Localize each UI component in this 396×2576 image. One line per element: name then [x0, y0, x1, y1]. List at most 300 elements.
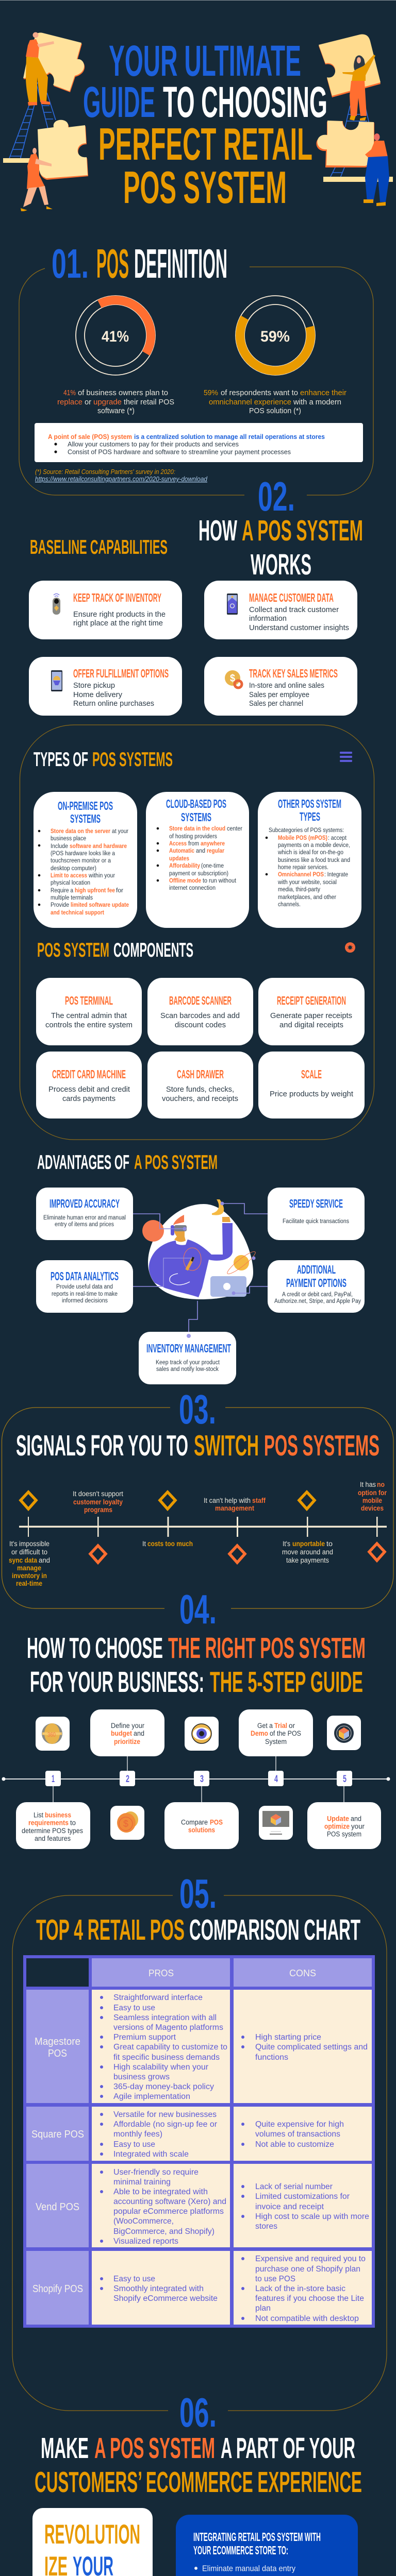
card: integrating retail POS with ecommerce	[176, 2515, 358, 2576]
table row: Magestore POS: business grows	[113, 2073, 170, 2081]
table row: Magestore POS: High scalability when your	[113, 2063, 208, 2072]
table row: Shopify POS: Shopify eCommerce website	[113, 2294, 218, 2303]
card: credit card machine: CREDIT CARD MACHINE	[52, 1067, 126, 1081]
text block: signal loyalty programs: programs	[84, 1506, 112, 1514]
card: cloud-based POS systems: Automatic	[169, 847, 194, 854]
panel: signals outline	[2, 1408, 393, 1608]
text block: signal staff management: staff	[252, 1497, 266, 1504]
heading: 02 How a POS system works	[199, 473, 363, 581]
card: inventory management: Keep track of your product	[156, 1360, 220, 1366]
card: additional payment options: A credit or debit card, PayPal,	[282, 1292, 353, 1298]
table row: Magestore POS: fit specific business demands	[113, 2053, 220, 2062]
card: POS terminal: controls the entire system	[45, 1021, 133, 1029]
card: receipt generation	[258, 978, 365, 1045]
table row: Vend POS: accounting software (Xero) and	[113, 2197, 226, 2206]
heading: 03 signals to switch: SIGNALS FOR YOU TO	[16, 1429, 188, 1462]
title: GUIDE	[83, 78, 155, 126]
card: speedy service	[268, 1188, 365, 1240]
card: other POS system types: : Integrate	[324, 871, 348, 878]
card: on-premise POS systems: touchscreen monitor or a	[51, 857, 111, 864]
table row: Vend POS: minimal training	[113, 2178, 171, 2187]
card: step 1 business requirements: List	[34, 1811, 43, 1819]
heading: 02 How a POS system works: 02.	[258, 473, 295, 519]
title	[83, 37, 327, 213]
text block: 59% caption: enhance their	[300, 388, 346, 397]
table row: Shopify POS: Lack of the in-store basic	[255, 2284, 345, 2293]
text block: 41% caption: their retail POS	[124, 398, 174, 406]
heading: 02 How a POS system works: HOW	[199, 514, 237, 547]
text block: 41% caption: of business owners plan to	[78, 388, 168, 397]
text block: 41% caption: replace	[57, 398, 82, 406]
card: on-premise POS systems: Provide	[51, 901, 69, 908]
table row: Vend POS: BigCommerce, and Shopify)	[113, 2227, 214, 2236]
icon: orange diamonds	[90, 1544, 385, 1563]
icon: menu bars	[340, 752, 352, 762]
card: manage customer data: information	[249, 615, 287, 623]
callout: POS definition box: Allow your customers to pay for their products and services	[68, 440, 239, 448]
table row: Shopify POS: Smoothly integrated with	[113, 2284, 204, 2293]
table row: Magestore POS: Agile implementation	[113, 2092, 190, 2101]
card: step 1 business requirements: business	[45, 1811, 71, 1819]
card: step 4 trial or demo	[239, 1709, 313, 1756]
table row: Vend POS: invoice and receipt	[255, 2202, 324, 2211]
card: on-premise POS systems: physical location	[51, 879, 90, 886]
text block: signal loyalty programs: It doesn't support	[73, 1490, 123, 1498]
card: step 5 update: Update	[327, 1815, 349, 1823]
table row: Vend POS	[26, 2164, 372, 2247]
heading: 05 comparison chart	[36, 1871, 360, 1946]
card: other POS system types: Subcategories of POS systems:	[269, 826, 344, 834]
card: on-premise POS systems: software and hardware	[70, 842, 127, 850]
card: offer fulfillment options: Return online purchases	[73, 700, 154, 708]
table row: Vend POS: Limited customizations for	[255, 2192, 350, 2201]
card: on-premise POS systems: within your	[88, 872, 115, 879]
card: POS data analytics	[36, 1260, 133, 1313]
card: cloud-based POS systems: (one-time	[201, 862, 224, 869]
icon: gold diamonds	[21, 1492, 315, 1509]
card: cloud-based POS systems: updates	[169, 855, 189, 862]
card: barcode scanner	[147, 978, 253, 1045]
card: step 2 define budget: Define your	[111, 1722, 144, 1730]
card: step 5 update: POS system	[327, 1830, 361, 1838]
heading: POS system components: POS SYSTEM	[37, 939, 109, 961]
card: step 5 update: your	[351, 1823, 365, 1830]
table row: Magestore POS: Great capability to customize to	[113, 2043, 227, 2052]
card: step 5 update: optimize	[324, 1823, 350, 1830]
table row: Magestore POS: High starting price	[255, 2033, 321, 2042]
table row: Shopify POS: purchase one of Shopify plan	[255, 2265, 360, 2274]
chart: comparison table: PROS	[148, 1968, 174, 1978]
callout: POS definition box: is a centralized solution to manage all retail operations at stores	[134, 433, 325, 440]
card: other POS system types: : accept	[328, 834, 346, 841]
icon: smartphone	[227, 594, 238, 615]
heading: 03 signals to switch	[16, 1386, 380, 1462]
chart: 59% donut: 59%	[260, 328, 290, 345]
table row: Magestore POS: functions	[255, 2053, 288, 2062]
icon: eye	[185, 1717, 219, 1751]
table row: Square POS: Not able to customize	[255, 2140, 334, 2149]
heading: POS system components: COMPONENTS	[113, 939, 193, 961]
card: keep track of inventory: Ensure right products in the	[73, 611, 166, 619]
chart: step timeline: 4	[274, 1774, 278, 1785]
heading: types of POS systems: TYPES OF	[34, 749, 88, 771]
icon: coins	[110, 1806, 144, 1840]
card: POS terminal: POS TERMINAL	[65, 994, 113, 1007]
card: additional payment options: ADDITIONAL	[297, 1263, 336, 1276]
heading: 05 comparison chart: TOP 4 RETAIL POS	[36, 1913, 185, 1946]
card: keep track of inventory	[29, 581, 182, 639]
text block: signal sync data: or difficult to	[11, 1548, 47, 1556]
text block: signal unportable: to	[326, 1540, 333, 1548]
card: cloud-based POS systems: SYSTEMS	[181, 810, 211, 824]
table row: Magestore POS: versions of Magento platforms	[113, 2023, 223, 2032]
card: POS data analytics: POS DATA ANALYTICS	[51, 1269, 119, 1283]
table row: Magestore POS	[26, 1990, 372, 2103]
card: additional payment options: Authorize.net, Stripe, and Apple Pay	[274, 1298, 361, 1304]
infographic canvas: DEFINITION	[134, 241, 227, 286]
card: revolutionize your customer experience: REVOLUTION	[44, 2519, 140, 2550]
card: manage customer data	[204, 581, 357, 639]
card: cloud-based POS systems: CLOUD-BASED POS	[166, 797, 226, 810]
table row: Magestore POS: Premium support	[113, 2033, 176, 2042]
card: step 5 update: and	[351, 1815, 361, 1823]
card: on-premise POS systems: at your	[112, 827, 128, 835]
card: improved accuracy	[36, 1188, 133, 1240]
table row: Magestore POS: 365-day money-back policy	[113, 2082, 214, 2091]
card: step 1 business requirements: requirements	[28, 1819, 69, 1827]
icon: coin and gear	[225, 670, 242, 688]
card: other POS system types: Mobile POS (mPOS)	[278, 834, 327, 841]
card: on-premise POS systems: desktop computer)	[51, 865, 96, 872]
panel: comparison outline	[12, 1895, 387, 2411]
card: other POS system types: Omnichannel POS	[278, 871, 324, 878]
table row: Magestore POS: POS	[48, 2048, 67, 2059]
card: POS data analytics: Provide useful data and	[56, 1284, 113, 1290]
card: cloud-based POS systems	[146, 792, 249, 928]
text block: 41% caption: upgrade	[93, 398, 122, 406]
table row: Shopify POS: Easy to use	[113, 2275, 155, 2283]
heading: 01 POS definition	[52, 241, 227, 286]
card: track key sales metrics: In-store and online sales	[249, 682, 324, 690]
card: barcode scanner: Scan barcodes and add	[160, 1011, 240, 1020]
card: other POS system types: media, third-party	[278, 886, 321, 893]
chart: signals timeline	[19, 1492, 387, 1563]
heading: 05 comparison chart: 05.	[179, 1871, 217, 1917]
card: receipt generation: and digital receipts	[279, 1021, 343, 1029]
table row: Magestore POS: Quite complicated settings and	[255, 2043, 368, 2052]
text block: signal mobile devices: option for	[358, 1489, 387, 1497]
table row: Vend POS: Lack of serial number	[255, 2182, 333, 2191]
card: track key sales metrics: Sales per channel	[249, 700, 303, 708]
card: other POS system types: channels.	[278, 901, 301, 908]
heading: 04 five-step guide	[27, 1586, 366, 1699]
card: step 4 trial or demo: or	[289, 1722, 295, 1730]
text block: signal sync data: It's impossible	[9, 1540, 50, 1548]
heading: advantages of a POS system: ADVANTAGES OF	[37, 1151, 129, 1174]
card: cloud-based POS systems: Store data in the cloud	[169, 825, 225, 832]
card: inventory management: sales and notify low-stock	[156, 1366, 219, 1372]
card: additional payment options	[268, 1260, 365, 1313]
chart: 59% donut	[236, 296, 315, 375]
card: step 1 business requirements: to	[70, 1819, 76, 1827]
illustration: team assembling puzzle, right	[316, 35, 393, 206]
text block: signal unportable: take payments	[286, 1556, 329, 1564]
table row: Square POS	[26, 2107, 372, 2161]
heading: baseline capabilities: BASELINE CAPABILITIES	[30, 536, 168, 558]
card: step 1 business requirements: and features	[35, 1835, 71, 1842]
card: step 4 trial or demo: Trial	[274, 1722, 287, 1730]
text block: signal sync data: inventory in	[12, 1572, 47, 1580]
text block: signal sync data: manage	[17, 1564, 41, 1572]
text block: signal sync data: and	[39, 1556, 50, 1564]
text block: signal unportable: move around and	[282, 1548, 333, 1556]
text block: 41% caption: 41%	[63, 388, 76, 397]
card: offer fulfillment options: OFFER FULFILLMENT OPTIONS	[73, 667, 169, 680]
table row: Square POS: monthly fees)	[113, 2130, 162, 2139]
text block: 41% caption: software (*)	[97, 406, 135, 415]
heading: 03 signals to switch: SWITCH	[194, 1429, 259, 1462]
card: step 2 define budget: prioritize	[114, 1738, 140, 1745]
table row: Square POS: Quite expensive for high	[255, 2120, 344, 2129]
chart: 41% donut: 41%	[102, 328, 129, 345]
text block: signal mobile devices: devices	[361, 1504, 384, 1512]
icon: coins: $	[123, 1819, 128, 1829]
table row: Magestore POS: Straightforward interface	[113, 1993, 203, 2002]
card: other POS system types: home repair services.	[278, 863, 328, 871]
chart: step timeline	[2, 1756, 390, 1802]
card: cloud-based POS systems: to run without	[203, 877, 237, 884]
card: step 2 define budget: budget	[111, 1730, 132, 1737]
text block: signal unportable: unportable	[292, 1540, 325, 1548]
card: on-premise POS systems: Require a	[51, 887, 73, 894]
icon: coin and gear: $	[230, 673, 235, 684]
card: barcode scanner: BARCODE SCANNER	[169, 994, 232, 1007]
table row: Square POS: Square POS	[31, 2129, 84, 2140]
callout: POS definition box	[35, 423, 363, 462]
card: track key sales metrics	[204, 657, 357, 716]
card: integrating retail POS with ecommerce: Eliminate manual data entry	[202, 2565, 295, 2573]
card: step 3 compare: solutions	[188, 1826, 215, 1834]
card: on-premise POS systems: ON-PREMISE POS	[58, 799, 113, 812]
icon: monitor with cube	[259, 1806, 293, 1840]
card: step 2 define budget	[90, 1709, 164, 1756]
card: step 4 trial or demo: of the POS	[270, 1730, 301, 1737]
card: on-premise POS systems: for	[116, 887, 123, 894]
heading: types of POS systems: POS SYSTEMS	[92, 749, 173, 771]
card: inventory management: INVENTORY MANAGEMENT	[146, 1342, 231, 1355]
card: cloud-based POS systems: Affordability	[169, 862, 200, 869]
card: cash drawer: Store funds, checks,	[166, 1085, 234, 1094]
text block: 59% caption: omnichannel experience	[209, 398, 291, 406]
text block: 59% caption	[204, 388, 346, 415]
text block: 59% caption: 59%	[204, 388, 218, 397]
illustration: team assembling puzzle, left	[3, 32, 88, 211]
card: revolutionize your customer experience	[32, 2508, 153, 2576]
card: receipt generation: Generate paper receipts	[270, 1011, 352, 1020]
chart: step timeline: 3	[200, 1774, 204, 1785]
card: step 4 trial or demo: Get a	[257, 1722, 273, 1730]
chart: comparison table: CONS	[289, 1968, 316, 1978]
table row: Vend POS: (WooCommerce,	[113, 2217, 174, 2226]
card: credit card machine: cards payments	[62, 1094, 116, 1103]
text block: signal sync data	[9, 1540, 50, 1587]
card: credit card machine: Process debit and credit	[48, 1085, 130, 1094]
card: on-premise POS systems: business place	[51, 835, 86, 842]
table row: Shopify POS: Expensive and required you to	[255, 2255, 366, 2263]
table row: Square POS: volumes of transactions	[255, 2130, 340, 2139]
heading: 02 How a POS system works: WORKS	[251, 548, 311, 581]
table row: Vend POS: stores	[255, 2222, 277, 2231]
table row: Vend POS: popular eCommerce platforms	[113, 2207, 224, 2216]
text block: signal loyalty programs	[73, 1490, 123, 1514]
icon: 360 globe	[36, 1717, 70, 1751]
text block: signal costs too much: costs too much	[147, 1540, 193, 1548]
card: manage customer data: Understand customer insights	[249, 624, 349, 632]
table row: Magestore POS: Seamless integration with all	[113, 2013, 217, 2022]
card: cash drawer: vouchers, and receipts	[162, 1094, 238, 1103]
table row: Vend POS: Vend POS	[36, 2201, 79, 2213]
card: POS terminal	[36, 978, 142, 1045]
icon: 360 globe: 360	[47, 1731, 56, 1738]
text block: signal mobile devices: no	[377, 1481, 385, 1488]
panel: types and components outline	[20, 725, 374, 1140]
table row: Shopify POS	[26, 2251, 372, 2325]
icon: remote scanner	[53, 594, 60, 615]
card: step 5 update	[307, 1802, 381, 1849]
card: step 1 business requirements	[16, 1802, 90, 1849]
source note	[35, 468, 208, 483]
card: other POS system types: payments on a mobile device,	[278, 841, 350, 849]
table row: Shopify POS: features if you choose the Lite	[255, 2294, 364, 2303]
card: POS terminal: The central admin that	[51, 1011, 127, 1020]
arrows: connector lines	[133, 1201, 268, 1336]
text block: signal sync data: real-time	[16, 1580, 42, 1587]
card: other POS system types	[258, 792, 361, 928]
card: step 1 business requirements: determine POS types	[22, 1827, 83, 1835]
card: other POS system types: TYPES	[300, 810, 320, 823]
table row: Square POS: Easy to use	[113, 2140, 155, 2149]
card: cash drawer: CASH DRAWER	[177, 1067, 224, 1081]
text block: signal unportable	[282, 1540, 333, 1564]
card: POS data analytics: informed decisions	[62, 1298, 108, 1304]
table row: Vend POS: Visualized reports	[113, 2237, 178, 2246]
card: on-premise POS systems: high upfront fee	[75, 887, 115, 894]
table row: Shopify POS: Not compatible with desktop	[255, 2314, 359, 2323]
icon: rotating cube	[327, 1716, 361, 1750]
heading: 04 five-step guide: FOR YOUR BUSINESS:	[30, 1666, 204, 1699]
table row: Magestore POS: Easy to use	[113, 2004, 155, 2012]
heading: 06 ecommerce experience: MAKE	[41, 2432, 89, 2465]
card: cloud-based POS systems: internet connection	[169, 884, 216, 891]
card: POS data analytics: reports in real-time to make	[52, 1291, 118, 1297]
card: step 4 trial or demo: Demo	[251, 1730, 268, 1737]
text block: signal staff management	[204, 1497, 266, 1512]
illustration: man with VR headset	[142, 1199, 257, 1299]
card: improved accuracy: Eliminate human error and manual	[43, 1215, 126, 1221]
card: cloud-based POS systems: payment or subscription)	[169, 870, 228, 877]
text block: signal sync data: sync data	[9, 1556, 37, 1564]
heading: 01 POS definition: POS	[96, 241, 129, 286]
heading: 06 ecommerce experience: 06.	[179, 2389, 217, 2435]
card: inventory management	[139, 1332, 236, 1384]
chart: comparison table	[23, 1955, 375, 2328]
card: improved accuracy: entry of items and prices	[55, 1222, 114, 1228]
text block: signal staff management: management	[215, 1504, 254, 1512]
heading: 04 five-step guide: 04.	[179, 1586, 217, 1632]
text block: signal mobile devices	[358, 1481, 387, 1512]
table row: Square POS: Versatile for new businesses	[113, 2110, 217, 2119]
card: scale: Price products by weight	[270, 1090, 354, 1098]
heading: 03 signals to switch: 03.	[179, 1386, 216, 1432]
callout: POS definition box: Consist of POS hardware and software to streamline your payment processes	[68, 448, 291, 455]
heading: advantages of a POS system: A POS SYSTEM	[134, 1151, 218, 1174]
card: cloud-based POS systems: and	[196, 847, 205, 854]
card: integrating retail POS with ecommerce: YOUR ECOMMERCE STORE TO:	[193, 2544, 288, 2557]
card: keep track of inventory: KEEP TRACK OF INVENTORY	[73, 591, 161, 604]
card: on-premise POS systems: Limit to access	[51, 872, 87, 879]
card: barcode scanner: discount codes	[175, 1021, 226, 1029]
heading: 06 ecommerce experience: A POS SYSTEM	[94, 2432, 215, 2465]
card: cash drawer	[147, 1052, 253, 1118]
table row: Square POS: Affordable (no sign-up fee or	[113, 2120, 217, 2129]
table row: Shopify POS: Shopify POS	[32, 2283, 83, 2295]
text block: signal mobile devices: mobile	[362, 1497, 382, 1504]
panel: POS definition outline	[19, 267, 373, 495]
card: manage customer data: Collect and track customer	[249, 606, 339, 614]
text block: signal costs too much: It	[142, 1540, 146, 1548]
card: keep track of inventory: right place at the right time	[73, 619, 163, 628]
source note: (*) Source: Retail Consulting Partners' survey in 2020:	[35, 468, 175, 476]
card: scale: SCALE	[301, 1067, 322, 1081]
card: offer fulfillment options: Store pickup	[73, 682, 115, 690]
card: on-premise POS systems: multiple terminals	[51, 894, 93, 901]
card: on-premise POS systems	[34, 792, 137, 928]
card: other POS system types: business like a food truck and	[278, 856, 350, 863]
table row: Vend POS: High cost to scale up with more	[255, 2212, 369, 2221]
heading: 04 five-step guide: HOW TO CHOOSE	[27, 1632, 163, 1665]
table row: Square POS: Integrated with scale	[113, 2150, 189, 2159]
table row: Vend POS: Able to be integrated with	[113, 2188, 208, 2196]
icon: phone with helmet	[51, 670, 62, 691]
card: cloud-based POS systems: center	[227, 825, 242, 832]
card: improved accuracy: IMPROVED ACCURACY	[50, 1197, 120, 1210]
heading: 06 ecommerce experience	[35, 2389, 362, 2499]
card: on-premise POS systems: and technical support	[51, 909, 104, 916]
card: scale	[258, 1052, 365, 1118]
card: cloud-based POS systems: from	[188, 840, 199, 847]
card: cloud-based POS systems: regular	[207, 847, 224, 854]
card: cloud-based POS systems: of hosting providers	[169, 833, 217, 840]
table row: Magestore POS: Magestore	[35, 2036, 80, 2047]
icon: gear	[345, 942, 355, 953]
chart: step timeline: 1	[52, 1774, 55, 1785]
card: credit card machine	[36, 1052, 142, 1118]
table row: Shopify POS: to use POS	[255, 2275, 295, 2283]
text block: signal staff management: It can't help with	[204, 1497, 251, 1504]
text block: 59% caption: with a modern	[293, 398, 341, 406]
chart: step timeline: 2	[126, 1774, 129, 1785]
text block: signal unportable: It's	[283, 1540, 290, 1548]
text block: signal mobile devices: It has	[360, 1481, 376, 1488]
chart: 41% donut	[76, 296, 155, 375]
card: step 4 trial or demo: System	[265, 1738, 287, 1745]
source note: https://www.retailconsultingpartners.com/2020-survey-download	[35, 475, 208, 483]
card: on-premise POS systems: Include	[51, 842, 68, 850]
card: on-premise POS systems: (POS hardware looks like a	[51, 850, 115, 857]
card: on-premise POS systems: Store data on the server	[51, 827, 110, 835]
card: step 3 compare: Compare	[181, 1819, 208, 1826]
card: speedy service: Facilitate quick transactions	[283, 1218, 349, 1225]
